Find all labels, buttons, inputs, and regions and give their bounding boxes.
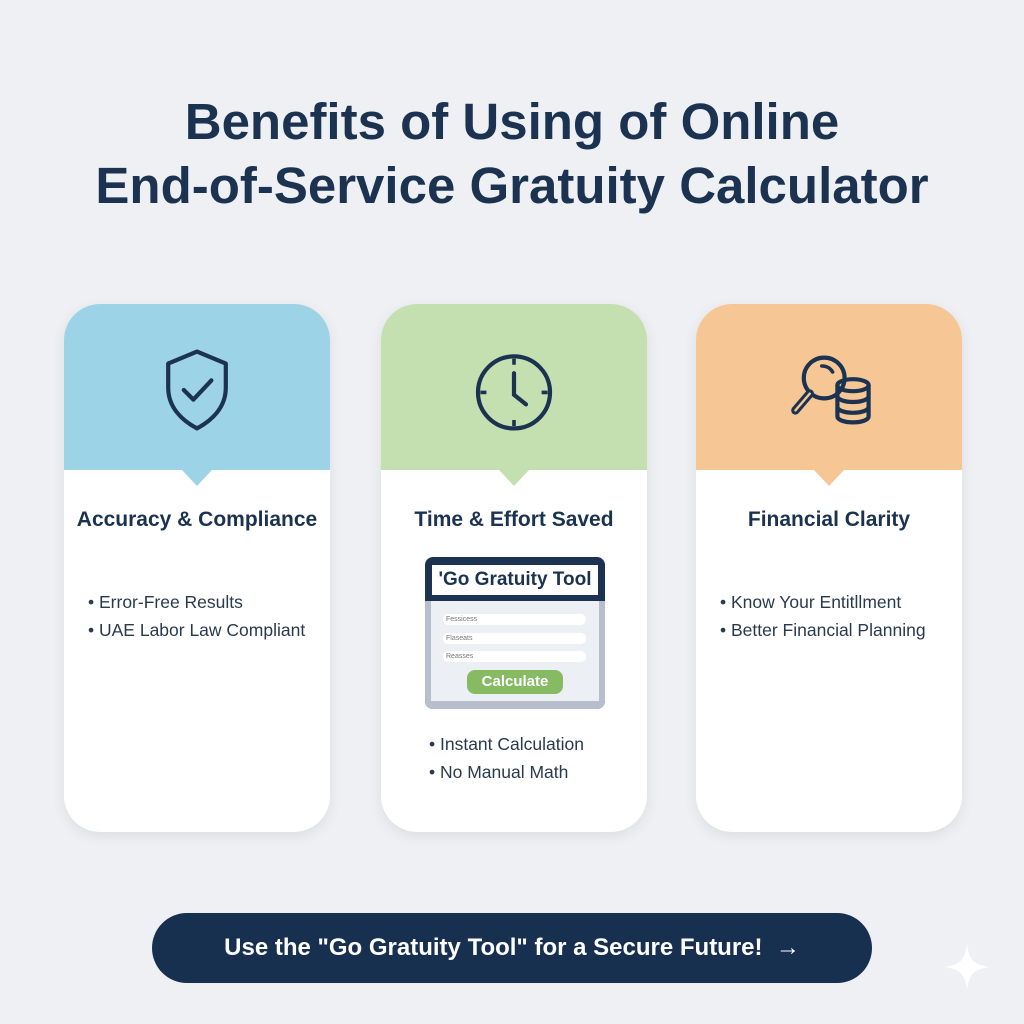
bullet list: • Better Financial Planning xyxy=(720,620,926,640)
panel: time xyxy=(381,304,647,832)
tool mockup: Reasses xyxy=(446,653,473,660)
cta button xyxy=(152,913,872,983)
heading: Time & Effort Saved xyxy=(414,508,614,531)
icon: shield xyxy=(166,350,228,430)
icon: magnifier and coins xyxy=(791,356,871,424)
bullet list: • Know Your Entitllment xyxy=(720,592,901,612)
icon: sparkle xyxy=(946,946,988,988)
tool mockup: Flaseats xyxy=(446,635,472,642)
bullet list: • UAE Labor Law Compliant xyxy=(88,620,305,640)
bullet list: • Instant Calculation xyxy=(429,734,584,754)
title: End-of-Service Gratuity Calculator xyxy=(95,157,929,214)
tool mockup: 'Go Gratuity Tool xyxy=(438,569,592,590)
bullet list xyxy=(88,592,306,640)
bullet list: • No Manual Math xyxy=(429,762,568,782)
title xyxy=(95,93,929,214)
icon: clock xyxy=(476,354,552,430)
tool mockup xyxy=(425,557,605,709)
cta button: Use the "Go Gratuity Tool" for a Secure Future! → xyxy=(224,934,800,961)
bullet list xyxy=(429,734,584,782)
bullet list: • Error-Free Results xyxy=(88,592,243,612)
tool mockup: Fessicess xyxy=(446,616,477,623)
heading: Financial Clarity xyxy=(748,508,910,531)
bullet list xyxy=(720,592,926,640)
tool mockup: Calculate xyxy=(482,673,548,690)
panel: financial xyxy=(696,304,962,832)
heading: Accuracy & Compliance xyxy=(77,508,317,531)
card header: orange xyxy=(696,304,962,470)
panel: accuracy xyxy=(64,304,330,832)
title: Benefits of Using of Online xyxy=(185,93,839,150)
card header: green xyxy=(381,304,647,470)
card header: blue xyxy=(64,304,330,470)
